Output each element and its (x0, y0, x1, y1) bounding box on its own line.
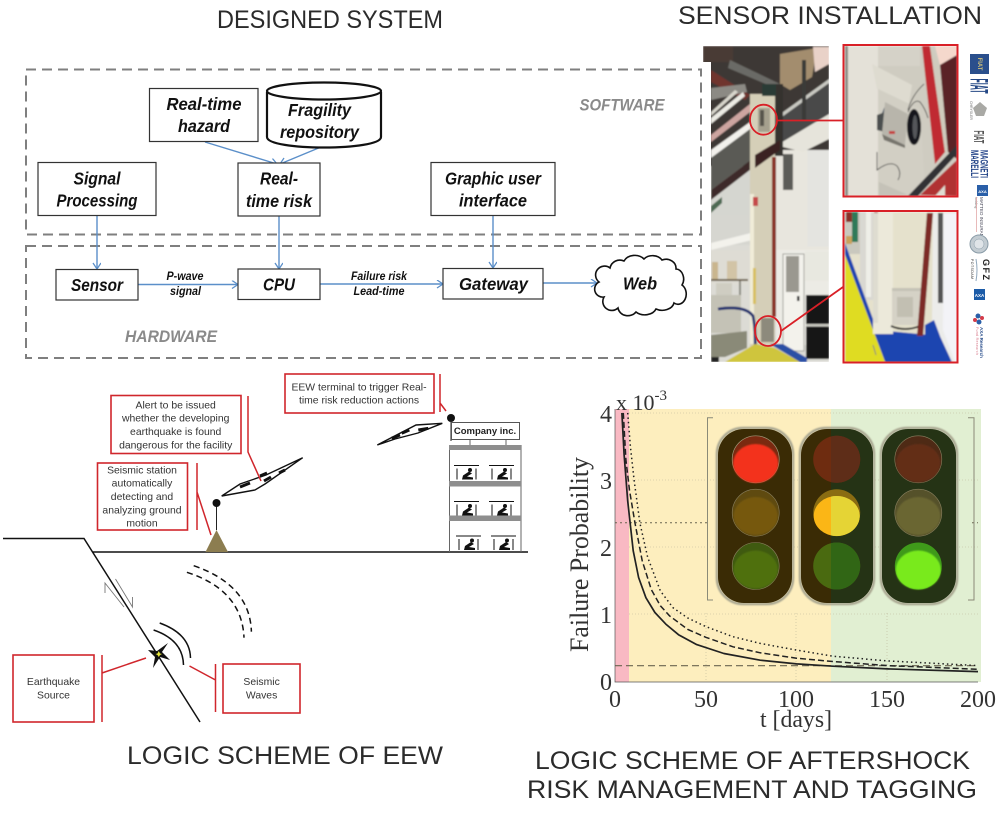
x axis tick labels: 100 (778, 687, 814, 713)
cylinder: fragility repository: repository (280, 122, 360, 142)
logo: fiat industrial: FIAT (976, 58, 982, 71)
logo: magneti marelli: MAGNETI (978, 150, 990, 178)
floor (725, 344, 800, 362)
box: graphic user interface: interface (459, 190, 527, 210)
callout: alert (111, 396, 261, 481)
reference lines (615, 522, 978, 524)
earthquake star (148, 643, 170, 668)
title: sensor installation: SENSOR INSTALLATION (678, 2, 982, 30)
y axis tick labels: 0 (600, 670, 612, 696)
logo: axa with text: MATTEO INSURANCE (979, 197, 984, 243)
cloud: web (595, 255, 686, 316)
panel: EEW logic scheme (3, 374, 528, 722)
label: failure risk and lead-time: Lead-time (354, 284, 405, 298)
box: sensor: Sensor (71, 275, 124, 295)
box: cpu: CPU (263, 274, 295, 294)
curve: dotted (628, 413, 978, 666)
callout: alert: dangerous for the facility (119, 440, 233, 451)
box: real-time hazard: hazard (178, 116, 230, 136)
logo: axa square (974, 289, 985, 300)
callout: earthquake source (13, 655, 146, 722)
arrows between blocks (97, 142, 597, 284)
logos column: FIAT (964, 78, 992, 94)
box: sensor (56, 270, 138, 300)
callout: alert: whether the developing (121, 414, 230, 425)
logo: chrysler star: CHRYSLER (969, 101, 973, 120)
box: real-time risk (238, 163, 320, 216)
curve: dashed (623, 413, 978, 669)
label: failure risk and lead-time (351, 269, 408, 298)
callout: seismic waves: Seismic (243, 677, 280, 688)
building company inc: Company inc. (454, 426, 516, 437)
title: logic scheme of EEW: LOGIC SCHEME OF EEW (127, 742, 443, 770)
logo: magneti marelli: MARELLI (968, 150, 980, 178)
box: real-time hazard (150, 88, 258, 142)
callout: earthquake source: Source (37, 690, 70, 701)
building company inc (447, 414, 521, 552)
label: p-wave signal: signal (170, 284, 202, 298)
x axis tick labels: 150 (869, 687, 905, 713)
callout: seismic station: automatically (112, 479, 173, 490)
x axis title: t [days] (760, 707, 832, 733)
label: p-wave signal (166, 269, 204, 298)
x axis tick labels: 200 (960, 687, 996, 713)
box: real-time risk: Real- (260, 168, 298, 188)
logo: fiat industrial (970, 54, 989, 74)
y axis tick labels (600, 402, 612, 696)
curve: solid (622, 413, 978, 672)
logo: axa with text: holding (974, 197, 978, 208)
x axis tick labels: 50 (694, 687, 718, 713)
photo: sensor installation main view (703, 46, 829, 362)
software dashed frame (26, 70, 701, 234)
logo: axa with text (974, 185, 988, 243)
cylinder: fragility repository (267, 82, 381, 148)
callout: earthquake source: Earthquake (27, 677, 80, 688)
traffic light: yellow (800, 428, 874, 604)
grid lines (629, 413, 978, 682)
title: designed system: DESIGNED SYSTEM (217, 6, 443, 34)
label: failure risk and lead-time: Failure risk (351, 269, 408, 283)
photo: sensor close-up bottom (844, 211, 958, 362)
box: gateway: Gateway (459, 274, 529, 294)
logo: chrysler star (969, 101, 987, 120)
scaffold (711, 279, 748, 281)
callout: seismic station: detecting and (111, 492, 173, 503)
lightning signal to building (377, 423, 442, 445)
callout: EEW terminal: time risk reduction actions (299, 396, 419, 406)
box: graphic user interface: Graphic user (445, 168, 542, 188)
box: real-time risk: time risk (246, 191, 313, 211)
y axis tick labels: 4 (600, 402, 612, 428)
traffic light: green (881, 428, 957, 604)
callout: alert: Alert to be issued (136, 400, 216, 412)
panel: aftershock failure probability chart (565, 388, 996, 733)
box: signal processing (38, 162, 156, 216)
fault slip arrows (105, 579, 132, 607)
seismic station tower (206, 499, 228, 552)
logo: magneti marelli (968, 150, 990, 178)
y axis tick labels: 1 (600, 603, 612, 629)
scale label: x 10 (616, 390, 654, 415)
box: gateway (443, 268, 543, 299)
y axis tick labels: 3 (600, 469, 612, 495)
box: signal processing: Signal (74, 168, 122, 188)
callout: EEW terminal: EEW terminal to trigger Real- (291, 382, 427, 394)
logos column: FIAT (970, 130, 987, 144)
ground surface and fault (3, 538, 528, 722)
callout: seismic waves (190, 664, 300, 713)
logo: gfz (970, 259, 991, 281)
seismic wave arcs (154, 623, 190, 665)
title: logic scheme of aftershock risk management and tagging: RISK MANAGEMENT AND TAGGING (527, 776, 977, 804)
callout: seismic station (98, 463, 211, 535)
y axis title: Failure Probability (565, 457, 594, 652)
lightning signal from station (222, 458, 303, 496)
door and wall (776, 250, 829, 345)
callout: seismic station: Seismic station (107, 466, 177, 476)
logo: gfz: POTSDAM (970, 259, 974, 279)
label: p-wave signal: P-wave (166, 269, 204, 283)
logo: axa with text: AXA (978, 189, 987, 194)
axes lines (615, 409, 978, 682)
logo: axa square: AXA (975, 293, 985, 298)
title: logic scheme of aftershock risk management and tagging: LOGIC SCHEME OF AFTERSHOCK (535, 747, 970, 775)
x axis tick labels (609, 687, 996, 713)
traffic light: red (717, 428, 793, 604)
column (750, 94, 775, 347)
photo: sensor close-up top (844, 45, 958, 196)
callout: alert: earthquake is found (130, 427, 222, 438)
callout: seismic waves: Waves (246, 690, 277, 701)
label: software: SOFTWARE (580, 96, 665, 115)
callout: seismic station: motion (126, 519, 158, 530)
box: real-time hazard: Real-time (166, 94, 242, 114)
box: cpu (238, 269, 320, 300)
right side walls (775, 150, 829, 250)
panel: system block diagram (26, 70, 701, 358)
logo: gfz: GFZ (981, 259, 991, 280)
title: logic scheme of aftershock risk management and tagging (527, 747, 977, 804)
y axis tick labels: 2 (600, 536, 612, 562)
logo: axa research fund: AXA Research (979, 327, 984, 358)
box: signal processing: Processing (56, 190, 138, 210)
box: graphic user interface (431, 162, 555, 216)
cylinder: fragility repository: Fragility (288, 100, 352, 120)
cloud: web: Web (623, 274, 657, 294)
photo callouts: red circles and connectors (750, 105, 843, 346)
risk zones (615, 409, 981, 682)
scale label: -3 (654, 388, 667, 404)
x axis tick labels: 0 (609, 687, 621, 713)
callout: seismic station: analyzing ground (102, 505, 182, 516)
brackets around traffic lights (708, 418, 974, 600)
hardware dashed frame (26, 246, 701, 358)
logos column (964, 54, 992, 358)
callout: EEW terminal (285, 374, 446, 413)
logo: university seal (970, 235, 988, 253)
dashed wave arcs (187, 566, 251, 638)
logo: axa research fund: Fund Research (975, 327, 979, 355)
logo: axa research fund (973, 314, 984, 358)
label: hardware: HARDWARE (125, 327, 218, 346)
